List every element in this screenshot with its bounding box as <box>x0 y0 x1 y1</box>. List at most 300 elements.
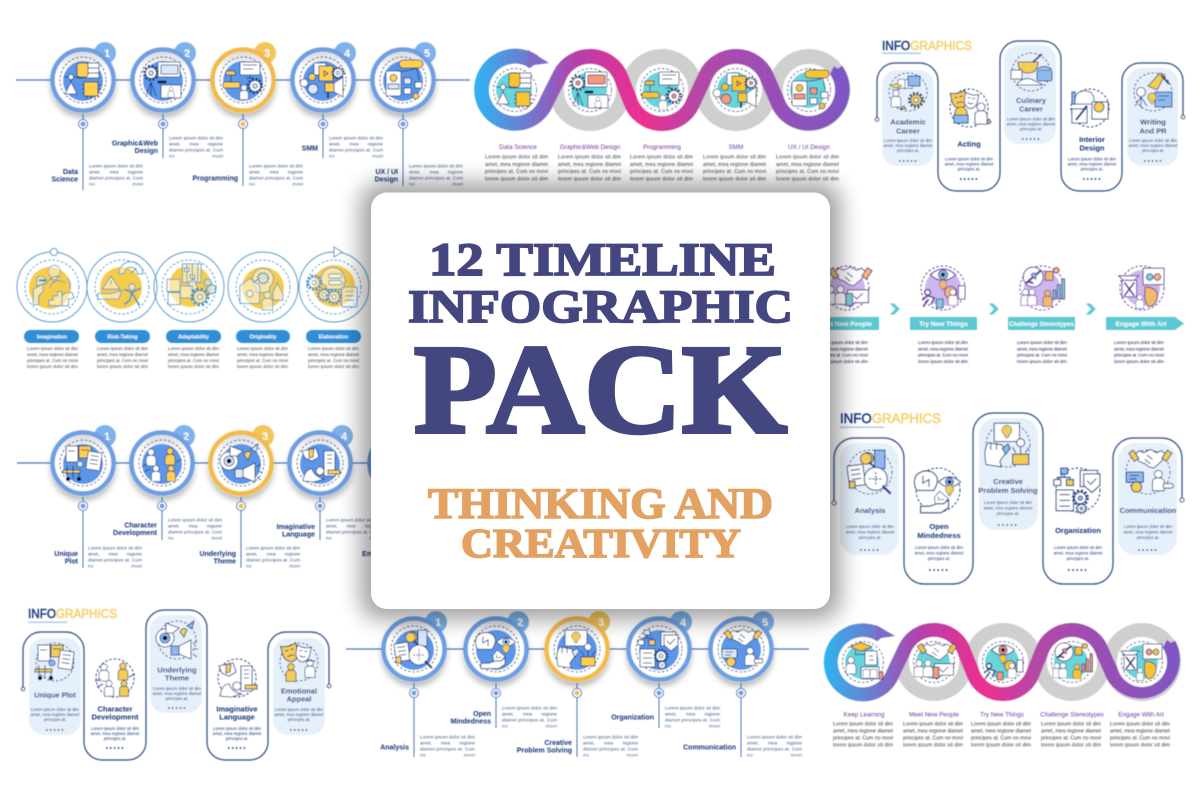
step 1 Unique Plot: amet, mea regione <box>88 552 142 556</box>
step 1 Unique Plot: diamet principes at. Cum <box>88 558 142 562</box>
step 5 Emotional Appeal, mostly hidden by the card <box>362 432 430 566</box>
panel: ribbon loop, bottom right <box>831 625 1177 748</box>
card Culinary Career: Lorem ipsum dolor sit dim <box>1007 116 1055 122</box>
item Risk-Taking: lorem ipsum dolor sit dim <box>97 364 148 369</box>
card Emotional Appeal: principes at. <box>288 717 310 722</box>
item Imagination: lorem ipsum dolor sit dim <box>27 364 78 369</box>
step 3 Underlying Theme: Underlying <box>199 551 236 558</box>
step 3 Programming: Programming <box>192 176 238 182</box>
step Try New Things: lorem ipsum dolor sit dim <box>918 359 968 364</box>
step 2 Graphic and Web Design: no movi <box>169 154 223 158</box>
loop item Keep Learning: lorem ipsum dolor sit dim <box>833 742 893 748</box>
card Underlying Theme: amet, mea regione diamet <box>153 691 202 696</box>
loop item 3 Programming: principes at. Cum no movi <box>630 169 693 175</box>
loop item Meet New People: principes at. Cum no movi <box>903 736 963 742</box>
step Meet New People: Lorem ipsum dolor sit dim <box>818 340 868 345</box>
connecting outline <box>875 41 1185 191</box>
step 3 Creative Problem Solving: 3 <box>598 617 604 629</box>
card Open Mindedness: principes at. <box>928 556 950 561</box>
card Organization: amet, mea regione diamet <box>1054 550 1103 556</box>
card Creative Problem Solving: Lorem ipsum dolor sit dim <box>984 500 1032 505</box>
step 5 Communication: Communication <box>683 744 736 752</box>
card Underlying Theme: Lorem ipsum dolor sit dim <box>153 686 201 691</box>
step 4 SMM: SMM <box>302 146 318 152</box>
item Risk-Taking: principes at. Cum no movi <box>97 358 148 363</box>
step 1 Data Science: amet, mea regione <box>89 170 143 174</box>
gradient ribbon <box>831 625 1177 694</box>
step 3 Creative Problem Solving: Creative <box>544 740 572 747</box>
step 2 Open Mindedness: amet, mea regione <box>502 712 557 716</box>
step 1 Data Science <box>50 42 143 190</box>
step 1 Unique Plot: Unique <box>54 551 78 558</box>
loop item 2 Graphic and Web Design: Lorem ipsum dolor sit dim <box>558 154 621 160</box>
step 1 Data Science: diamet principes at. Cum <box>89 176 143 180</box>
item Risk-Taking: Risk-Taking <box>107 334 138 340</box>
item Elaboration: Lorem ipsum dolor sit dim <box>308 346 359 351</box>
loop item 1 Data Science: lorem ipsum dolor sit dim <box>485 176 548 182</box>
step 2 Graphic and Web Design: Graphic&Web <box>112 140 158 148</box>
item Adaptability: principes at. Cum no movi <box>168 358 219 363</box>
step 5 UX / UI Design: 5 <box>424 48 430 60</box>
step 3 Creative Problem Solving: Problem Solving <box>517 748 572 754</box>
step 2 Open Mindedness: diamet principes at. Cum <box>502 718 557 722</box>
step 1 Unique Plot <box>50 425 142 568</box>
connecting outline <box>21 610 331 760</box>
step 3 Creative Problem Solving: amet, mea regione <box>583 740 638 746</box>
card Emotional Appeal: Lorem ipsum dolor sit dim <box>275 707 323 712</box>
loop item 2 Graphic and Web Design: principes at. Cum no movi <box>558 169 621 175</box>
card Unique Plot: amet, mea regione diamet <box>31 712 80 717</box>
step 4 SMM: Lorem ipsum dolor sit dim <box>329 136 383 140</box>
card Analysis <box>846 450 895 550</box>
panel: programme timeline, top left <box>16 42 470 190</box>
item Originality: principes at. Cum no movi <box>237 358 288 363</box>
step 5 Communication: diamet principes at. Cum <box>747 746 802 752</box>
card Acting <box>945 89 994 179</box>
step Challenge Stereotypes <box>1008 266 1075 364</box>
card Academic Career: amet, mea regione diamet <box>884 143 933 148</box>
step 1 Analysis: no movi <box>420 752 475 758</box>
step 4 Imaginative Language: amet, mea regione <box>326 524 380 528</box>
loop item 4 SMM: SMM <box>729 144 743 151</box>
loop item Challenge Stereotypes: lorem ipsum dolor sit dim <box>1041 742 1101 748</box>
step 3 Programming: amet, mea regione <box>249 170 303 174</box>
card Character Development: Lorem ipsum dolor sit dim <box>91 726 139 731</box>
card Underlying Theme: Underlying <box>157 666 197 674</box>
step 4 Organization: diamet principes at. Cum <box>665 718 720 722</box>
step 3 Underlying Theme: no movi <box>246 564 300 568</box>
grey rings <box>902 630 1174 694</box>
loop item Try New Things: lorem ipsum dolor sit dim <box>971 742 1031 748</box>
step Try New Things <box>910 266 977 364</box>
card Academic Career <box>884 73 933 161</box>
step Engage With Art: Engage With Art <box>1116 321 1167 328</box>
item Adaptability: amet, mea regione diamet <box>168 352 220 357</box>
card Organization: principes at. <box>1067 556 1089 561</box>
loop item Meet New People: lorem ipsum dolor sit dim <box>903 742 963 748</box>
step 5 UX / UI Design: diamet principes at. Cum <box>409 176 463 180</box>
step 2 Character Development: amet, mea regione <box>168 524 222 528</box>
step 5 Emotional Appeal, mostly hidden by the card: Appeal <box>373 558 396 566</box>
loop item Meet New People: amet, mea regione diamet <box>903 728 964 734</box>
step 5 Communication: 5 <box>762 617 768 629</box>
step Engage With Art <box>1106 266 1184 364</box>
loop item Try New Things: principes at. Cum no movi <box>971 736 1031 742</box>
step Challenge Stereotypes: principes at. Cum no movi <box>1017 353 1067 358</box>
card Underlying Theme: principes at. <box>166 696 188 701</box>
loop item 2 Graphic and Web Design: lorem ipsum dolor sit dim <box>558 176 621 182</box>
title line: 12 Timeline: 12 TIMELINE <box>429 234 776 286</box>
step Try New Things: Try New Things <box>919 321 968 328</box>
card Analysis: amet, mea regione diamet <box>846 530 895 534</box>
step 2 Open Mindedness: Lorem ipsum dolor sit dim <box>502 706 557 710</box>
card Imaginative Language: Imaginative <box>216 704 258 714</box>
step 3 Underlying Theme: diamet principes at. Cum <box>246 558 300 562</box>
step Try New Things: principes at. Cum no movi <box>918 353 968 358</box>
step 5 UX / UI Design <box>370 42 463 186</box>
card Acting: principes at. <box>958 166 980 172</box>
tinted boxes <box>882 45 1178 166</box>
step 5 Communication <box>683 611 802 758</box>
tinted boxes <box>840 418 1177 555</box>
step Meet New People: principes at. Cum no movi <box>818 353 868 358</box>
step 1 Unique Plot: Plot <box>65 558 79 566</box>
card Writing And PR: And PR <box>1139 126 1167 136</box>
loop item Engage With Art: principes at. Cum no movi <box>1110 736 1170 742</box>
loop item Challenge Stereotypes <box>1040 637 1104 748</box>
loop item 3 Programming: amet, mea regione diamet <box>630 162 694 168</box>
loop item 1 Data Science <box>485 64 549 182</box>
step 3 Creative Problem Solving <box>517 611 638 758</box>
step 2 Graphic and Web Design: amet, mea regione <box>169 142 223 146</box>
step Meet New People: Meet New People <box>818 321 872 328</box>
item Imagination: principes at. Cum no movi <box>27 358 78 363</box>
card Writing And PR: Writing <box>1140 118 1166 126</box>
card Imaginative Language: principes at. <box>226 736 248 741</box>
step 5 UX / UI Design: Design <box>375 176 398 184</box>
step Challenge Stereotypes: Lorem ipsum dolor sit dim <box>1017 340 1067 345</box>
loop item Engage With Art: lorem ipsum dolor sit dim <box>1110 742 1170 748</box>
panel: thinking rounded boxes, lower right <box>832 410 1184 584</box>
step 1 Analysis: amet, mea regione <box>420 740 475 746</box>
step 4 SMM: diamet principes at. Cum <box>329 148 383 152</box>
step 1 Analysis: 1 <box>435 617 441 629</box>
panel: arrow steps, middle right <box>812 266 1184 364</box>
panel: story timeline, lower left <box>17 425 430 568</box>
step 1 Analysis: Lorem ipsum dolor sit dim <box>420 734 475 740</box>
step 4 Organization <box>611 611 720 728</box>
item Imagination: amet, mea regione diamet <box>27 352 79 357</box>
loop item 2 Graphic and Web Design: Graphic&Web Design <box>560 144 621 151</box>
card Organization <box>1054 468 1103 570</box>
step 3 Programming: Lorem ipsum dolor sit dim <box>249 164 303 168</box>
step 4 Organization: amet, mea regione <box>665 712 720 716</box>
loop item Keep Learning: principes at. Cum no movi <box>833 736 893 742</box>
loop item Challenge Stereotypes: Lorem ipsum dolor sit dim <box>1041 722 1101 728</box>
card Culinary Career: Culinary <box>1016 96 1047 105</box>
step 1 Data Science: Science <box>52 176 78 184</box>
step 3 Creative Problem Solving: no movi <box>583 752 638 758</box>
loop item 5 UX UI Design: principes at. Cum no movi <box>776 169 839 175</box>
step Engage With Art: lorem ipsum dolor sit dim <box>1114 359 1164 364</box>
card Writing And PR: principes at. <box>1142 148 1164 153</box>
panel: careers rounded boxes, top right <box>875 39 1185 191</box>
step 4 Organization: no movi <box>665 724 720 728</box>
card Communication: amet, mea regione diamet <box>1124 530 1173 534</box>
card Analysis: Lorem ipsum dolor sit dim <box>846 524 894 529</box>
card Interior Design: amet, mea regione diamet <box>1068 162 1117 166</box>
panel: story rounded boxes, bottom left <box>21 607 331 760</box>
item Elaboration: principes at. Cum no movi <box>308 358 359 363</box>
step Meet New People <box>812 266 879 364</box>
step 3 Underlying Theme: 3 <box>262 431 268 443</box>
item Elaboration: lorem ipsum dolor sit dim <box>308 364 359 369</box>
card Character Development: Development <box>91 712 139 722</box>
step 1 Unique Plot: Lorem ipsum dolor sit dim <box>88 546 142 550</box>
card Unique Plot: Lorem ipsum dolor sit dim <box>31 707 79 712</box>
step 2 Graphic and Web Design: diamet principes at. Cum <box>169 148 223 152</box>
step 1 Data Science: Lorem ipsum dolor sit dim <box>89 164 143 168</box>
step 4 SMM: 4 <box>344 48 351 60</box>
loop item 1 Data Science: Lorem ipsum dolor sit dim <box>485 154 548 160</box>
card Analysis: Analysis <box>855 506 885 515</box>
card Imaginative Language <box>213 659 262 748</box>
step Meet New People: amet, mea regione diamet <box>818 346 869 351</box>
card Creative Problem Solving: principes at. <box>997 511 1019 516</box>
step 2 Open Mindedness: no movi <box>502 724 557 728</box>
card Academic Career: Academic <box>890 118 926 126</box>
card Interior Design <box>1068 89 1117 179</box>
card Culinary Career: principes at. <box>1020 126 1042 132</box>
card Writing And PR <box>1129 73 1178 161</box>
item Originality: Lorem ipsum dolor sit dim <box>237 346 288 351</box>
item Imagination <box>17 248 87 369</box>
loop item Engage With Art: Lorem ipsum dolor sit dim <box>1110 722 1170 728</box>
step 1 Data Science: Data <box>63 169 78 176</box>
card Imaginative Language: Language <box>219 712 255 722</box>
card Interior Design: Lorem ipsum dolor sit dim <box>1068 156 1116 162</box>
card Unique Plot: principes at. <box>44 717 66 722</box>
card Communication: principes at. <box>1137 535 1159 540</box>
loop item Try New Things: Try New Things <box>980 712 1024 718</box>
connecting outline <box>832 413 1184 584</box>
card Underlying Theme: Theme <box>165 674 189 682</box>
loop item Keep Learning: amet, mea regione diamet <box>833 728 894 734</box>
card shadow <box>360 182 841 620</box>
step 4 Imaginative Language: diamet principes at. Cum <box>326 530 380 534</box>
card Emotional Appeal <box>275 643 324 730</box>
step 5 UX / UI Design: amet, mea regione <box>409 170 463 174</box>
step 4 SMM: no movi <box>329 154 383 158</box>
title card <box>371 192 830 609</box>
loop item 1 Data Science: amet, mea regione diamet <box>485 162 549 168</box>
card Organization: Lorem ipsum dolor sit dim <box>1054 545 1102 550</box>
tinted boxes <box>29 615 325 735</box>
heading: INFOGRAPHICS <box>28 607 117 621</box>
step 1 Unique Plot: 1 <box>104 431 110 443</box>
card Interior Design: Design <box>1079 144 1105 152</box>
arrow <box>1087 304 1095 314</box>
step 3 Programming <box>192 42 303 186</box>
card Academic Career: Career <box>896 126 920 136</box>
card Analysis: principes at. <box>859 535 881 540</box>
card Open Mindedness: Lorem ipsum dolor sit dim <box>915 545 963 550</box>
loop item Meet New People <box>903 637 964 748</box>
step 3 Programming: 3 <box>264 48 270 60</box>
step 1 Unique Plot: no movi <box>88 564 142 568</box>
card Emotional Appeal: Appeal <box>286 694 312 704</box>
heading: INFOGRAPHICS <box>882 39 972 53</box>
loop item 1 Data Science: Data Science <box>499 144 537 151</box>
step 2 Open Mindedness: 2 <box>517 617 523 629</box>
loop item 2 Graphic and Web Design: amet, mea regione diamet <box>558 162 622 168</box>
step Challenge Stereotypes: amet, mea regione diamet <box>1017 346 1068 351</box>
item Originality <box>228 252 298 369</box>
loop item 3 Programming <box>630 64 694 182</box>
step 1 Data Science: no movi <box>89 182 143 186</box>
heading: INFOGRAPHICS <box>840 410 941 426</box>
loop item 1 Data Science: principes at. Cum no movi <box>485 169 548 175</box>
step Engage With Art: Lorem ipsum dolor sit dim <box>1114 340 1164 345</box>
loop item 4 SMM: lorem ipsum dolor sit dim <box>703 176 766 182</box>
step 2 Character Development: no movi <box>168 536 222 540</box>
step 3 Underlying Theme: Theme <box>213 558 236 566</box>
step Try New Things: Lorem ipsum dolor sit dim <box>918 340 968 345</box>
card Unique Plot: Unique Plot <box>34 690 76 700</box>
loop item Engage With Art <box>1110 637 1171 748</box>
card Creative Problem Solving: Creative <box>993 477 1023 486</box>
loop item 2 Graphic and Web Design <box>558 64 622 182</box>
step 5 UX / UI Design: UX / UI <box>375 169 398 176</box>
item Risk-Taking: Lorem ipsum dolor sit dim <box>97 346 148 351</box>
title line: Pack: PACK <box>414 320 787 460</box>
grey rings <box>556 56 842 124</box>
card Interior Design: Interior <box>1079 135 1105 144</box>
step Challenge Stereotypes: Challenge Stereotypes <box>1009 322 1075 328</box>
item Elaboration: Elaboration <box>319 334 348 340</box>
card Imaginative Language: Lorem ipsum dolor sit dim <box>213 726 261 731</box>
item Originality: amet, mea regione diamet <box>237 352 289 357</box>
step 5 Emotional Appeal, mostly hidden by the card: Emotional <box>362 551 396 558</box>
card Character Development: amet, mea regione diamet <box>91 731 140 736</box>
loop item Keep Learning <box>833 637 894 748</box>
step 5 Communication: Lorem ipsum dolor sit dim <box>747 734 802 740</box>
step 3 Underlying Theme: amet, mea regione <box>246 552 300 556</box>
item Imagination: Lorem ipsum dolor sit dim <box>27 346 78 351</box>
step 1 Data Science: 1 <box>104 48 110 60</box>
loop item Challenge Stereotypes: principes at. Cum no movi <box>1041 736 1101 742</box>
loop item Try New Things <box>971 637 1032 748</box>
loop item 3 Programming: Programming <box>643 144 681 151</box>
step 1 Analysis <box>380 611 475 758</box>
card Writing And PR: Lorem ipsum dolor sit dim <box>1129 138 1177 143</box>
card Culinary Career: amet, mea regione diamet <box>1007 122 1056 126</box>
arrow <box>990 304 998 314</box>
card Creative Problem Solving: Problem Solving <box>978 486 1038 495</box>
subtitle line: Creativity: CREATIVITY <box>461 520 741 566</box>
step 4 Imaginative Language: no movi <box>326 536 380 540</box>
card Communication: Lorem ipsum dolor sit dim <box>1124 524 1172 529</box>
panel: creativity circles, middle left <box>17 247 369 369</box>
loop item Meet New People: Meet New People <box>909 712 959 718</box>
loop item Try New Things: amet, mea regione diamet <box>971 728 1032 734</box>
item Risk-Taking: amet, mea regione diamet <box>97 352 149 357</box>
item Adaptability <box>154 252 224 369</box>
card Character Development: principes at. <box>104 736 126 741</box>
step 2 Graphic and Web Design: Lorem ipsum dolor sit dim <box>169 136 223 140</box>
step 3 Programming: diamet principes at. Cum <box>249 176 303 180</box>
item Adaptability: Lorem ipsum dolor sit dim <box>168 346 219 351</box>
step 5 UX / UI Design: no movi <box>409 182 463 186</box>
step 2 Character Development: diamet principes at. Cum <box>168 530 222 534</box>
title line: Infographic: INFOGRAPHIC <box>408 281 793 333</box>
loop item 3 Programming: lorem ipsum dolor sit dim <box>630 176 693 182</box>
step Meet New People: lorem ipsum dolor sit dim <box>818 359 868 364</box>
card Organization: Organization <box>1055 526 1101 535</box>
step 2 Character Development: 2 <box>183 431 189 443</box>
step Engage With Art: principes at. Cum no movi <box>1114 353 1164 358</box>
loop item 5 UX UI Design: amet, mea regione diamet <box>776 162 840 168</box>
step 2 Character Development: Character <box>124 522 157 530</box>
card Character Development: Character <box>97 704 133 714</box>
card Open Mindedness: Mindedness <box>917 531 961 540</box>
step 2 Character Development: Lorem ipsum dolor sit dim <box>168 518 222 522</box>
item Originality: Originality <box>250 334 276 340</box>
step 1 Analysis: Analysis <box>380 744 409 752</box>
step 3 Underlying Theme: Lorem ipsum dolor sit dim <box>246 546 300 550</box>
step 2 Graphic and Web Design <box>112 42 223 158</box>
card Acting: Lorem ipsum dolor sit dim <box>945 156 993 162</box>
step 4 Imaginative Language: Imaginative <box>276 524 315 531</box>
step 4 Imaginative Language <box>276 425 380 540</box>
loop item Try New Things: Lorem ipsum dolor sit dim <box>971 722 1031 728</box>
card Emotional Appeal: Emotional <box>281 686 317 696</box>
step 4 Imaginative Language: Language <box>282 532 315 538</box>
step 1 Analysis: diamet principes at. Cum <box>420 746 475 752</box>
card Academic Career: principes at. <box>897 148 919 153</box>
loop item 3 Programming: Lorem ipsum dolor sit dim <box>630 154 693 160</box>
item Adaptability: lorem ipsum dolor sit dim <box>168 364 219 369</box>
step 3 Programming: no movi <box>249 182 303 186</box>
step 2 Open Mindedness <box>451 611 557 728</box>
step Engage With Art: amet, mea regione diamet <box>1114 346 1165 351</box>
step Challenge Stereotypes: lorem ipsum dolor sit dim <box>1017 359 1067 364</box>
loop item 5 UX UI Design: UX / UI Design <box>788 144 830 151</box>
loop item Engage With Art: amet, mea regione diamet <box>1110 728 1171 734</box>
loop item 4 SMM: Lorem ipsum dolor sit dim <box>703 154 766 160</box>
loop item 5 UX UI Design <box>776 64 840 182</box>
step 2 Character Development <box>113 425 222 540</box>
step Try New Things: amet, mea regione diamet <box>918 346 969 351</box>
loop item Engage With Art: Engage With Art <box>1118 712 1164 718</box>
card Acting: amet, mea regione diamet <box>945 162 994 166</box>
step 4 Imaginative Language: 4 <box>341 431 348 443</box>
step 3 Creative Problem Solving: diamet principes at. Cum <box>583 746 638 752</box>
subtitle line: Thinking and: THINKING AND <box>428 481 773 528</box>
loop item 4 SMM: principes at. Cum no movi <box>703 169 766 175</box>
step 5 UX / UI Design: Lorem ipsum dolor sit dim <box>409 164 463 168</box>
loop item Meet New People: Lorem ipsum dolor sit dim <box>903 722 963 728</box>
step 5 Communication: amet, mea regione <box>747 740 802 746</box>
step 2 Open Mindedness: Open <box>473 711 491 718</box>
arrow <box>891 304 899 314</box>
card Culinary Career <box>1007 53 1056 139</box>
card Acting: Acting <box>957 140 981 148</box>
gradient ribbon <box>482 50 845 123</box>
loop item Keep Learning: Lorem ipsum dolor sit dim <box>833 722 893 728</box>
card Communication <box>1120 450 1177 550</box>
loop item Keep Learning: Keep Learning <box>844 712 885 718</box>
